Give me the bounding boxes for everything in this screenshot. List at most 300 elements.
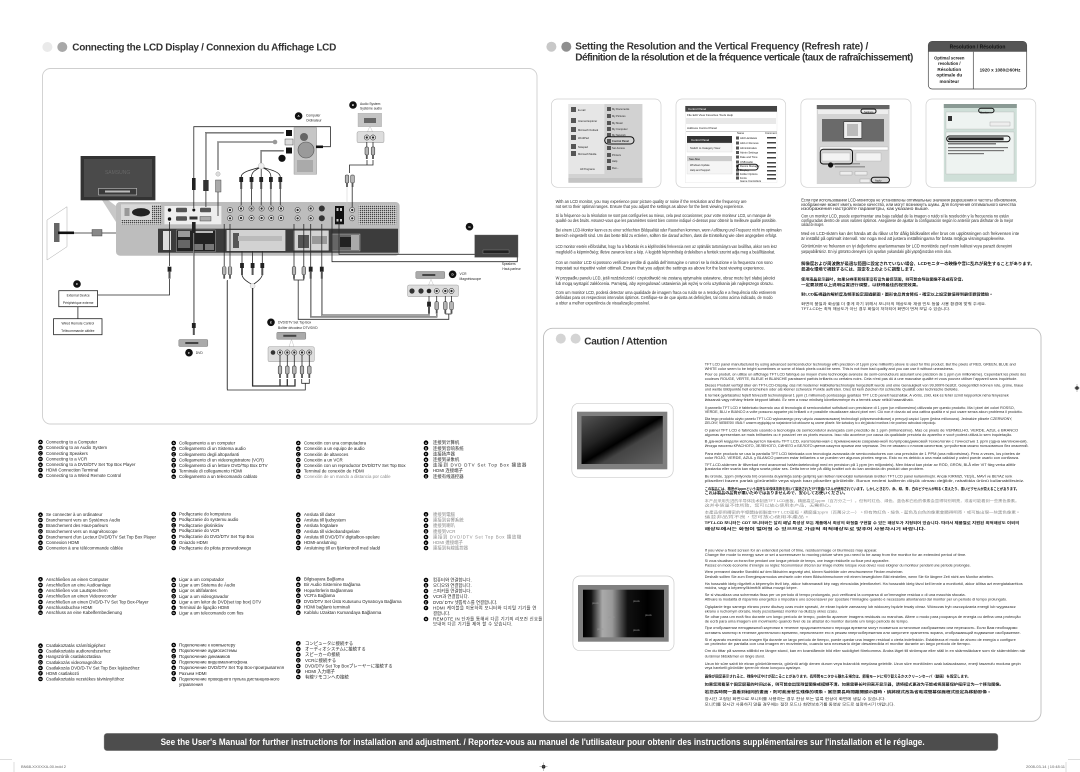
legend: Hungarian connection list: Csatlakoztatás számítógéphez	[46, 643, 106, 648]
legend: Italian connection list: C	[173, 452, 176, 456]
legend: Korean connection list: B	[425, 583, 428, 587]
caution text: dead pixels: ljusstarka eller svarta kan några svarta pixlar ses. Detta beror inte på dålig kvalitet och du kan använda din produkt utan problem.	[705, 466, 924, 471]
image: display with image retention: pixels	[592, 601, 599, 605]
legend: Swedish connection list: Ansluta högtalare	[304, 523, 339, 528]
legend: Russian connection list: Подключение DVD/DTV Set Top Box-проигрывателя	[179, 665, 285, 670]
legend: Japanese connection list: HDMI 入力端子	[305, 668, 336, 675]
legend: Simplified Chinese connection list: B	[425, 446, 428, 450]
external device C and wired remote control	[54, 222, 171, 335]
table: optimal resolution: Optimal screen	[934, 55, 965, 60]
legend: English connection list	[38, 440, 136, 478]
legend: Turkish connection list	[296, 576, 402, 615]
legend: English connection list: G	[39, 474, 42, 478]
table: optimal resolution: Resolution / Résolution	[950, 44, 1005, 50]
screenshot: display properties: Settings	[864, 110, 874, 114]
legend: Japanese connection list	[296, 640, 393, 680]
screenshot: vista display settings: Monitor	[980, 110, 989, 114]
screenshot: control panel: Control Panel	[688, 107, 707, 111]
screenshot: display properties: Apply	[875, 178, 882, 182]
display rear thumbnail: SAMSUNG	[105, 170, 130, 176]
legend: Traditional Chinese connection list: A	[425, 512, 428, 516]
caution text: dead pixels: 本产品采用先进的半导体技术制造TFT LCD面板，精度高达1ppm（百万分之一）。但有时红色、绿色、蓝色和白色的像素会显得特别明亮，或者可能看到一些黑色像素。	[705, 498, 1019, 503]
legend: Polish connection list: Podłączanie do komputera	[179, 512, 231, 516]
caution text: dead pixels: Bu üründe, 1ppm (milyonda bir) oranında duyarlılığa sahip gelişmiş yarı iletken teknolojisi kullanılarak üretilen TFT LCD panel kullanılmıştır. Ancak KIRMIZI, YEŞİL, MAVİ ve BEYAZ renk	[705, 474, 1012, 478]
legend: Simplified Chinese connection list: C	[425, 452, 428, 456]
text block: resolution notes, left column: W przypadku panelu LCD, jeśli rozdzielczość i częstotliwość nie zostaną optymalnie ustawione, obraz może być słabej jakości	[556, 276, 775, 280]
screenshot: start menu: E-mail	[578, 108, 586, 112]
footer banner: See the User's Manual for further instructions for installation and adjustment. / Reportez-vous au manuel de l'utilisateur pour obtenir des instructions supplémentaires sur l'installation et le réglage.	[161, 737, 925, 747]
screenshot: start menu	[551, 99, 661, 187]
table: optimal resolution: 1920 x 1080@60Hz	[980, 68, 1021, 73]
legend: Spanish connection list: Conexión de altavoces	[304, 452, 349, 457]
computer A: A	[298, 114, 301, 118]
legend: German connection list: Anschlussbuchse HDMI	[46, 605, 92, 610]
caution text: image retention: Passez en mode économie d'énergie ou réglez l'économiseur d'écran sur image mobile lorsque vous devez vous éloigner du moniteur pendant une période prolongée.	[705, 562, 971, 568]
legend: Korean connection list: D	[425, 595, 428, 599]
legend: Italian connection list	[171, 440, 268, 479]
caution text: dead pixels: Para este producto se usa la pantalla TFT LCD fabricada con tecnología avanzada de semiconductores con una precisión de 1 PPM (una millonésima). Pero a veces, los píxeles de	[705, 451, 1021, 456]
legend: Korean connection list: C	[425, 589, 428, 593]
legend: English connection list: B	[39, 446, 42, 450]
screenshot: start menu: Notepad	[578, 145, 588, 149]
legend: German connection list: Anschließen an einen Computer	[46, 577, 109, 582]
legend: German connection list	[38, 577, 149, 615]
caution text: dead pixels: WHITE color seem to be bright sometimes or some of black pixels could be seen. This is not from bad quality and you can use it without uneasiness.	[705, 366, 954, 371]
screenshot: start menu: My Computer	[612, 127, 628, 131]
print slug: 2008-03-14 | 10:48:11	[1026, 765, 1065, 769]
legend: Hungarian connection list: E	[39, 666, 42, 670]
legend: Italian connection list: B	[173, 447, 176, 451]
legend: German connection list: G	[39, 611, 42, 615]
legend: Portuguese connection list: Ligar os altifalantes	[179, 588, 218, 593]
legend: Polish connection list: E	[173, 535, 175, 539]
legend: Swedish connection list: A	[297, 513, 300, 517]
legend: Spanish connection list: Terminal de conexión de HDMI	[304, 468, 364, 474]
legend: Simplified Chinese connection list: A	[425, 441, 428, 445]
image: display with image retention	[573, 576, 674, 651]
legend: English connection list: A	[39, 440, 42, 444]
caution text: image retention: 画像が固定表示されると、残像やぼやけが起こることがあります。長時間モニタから離れる場合は、節電モードに切り替えるかスクリーンセーバ（動画）を設定します。	[705, 674, 971, 678]
legend: Swedish connection list: E	[297, 535, 299, 539]
legend: Swedish connection list: Ansluta till dator	[304, 512, 336, 517]
legend: Traditional Chinese connection list: G	[425, 546, 428, 550]
caution text: dead pixels: これは製品の品質が悪いためではありませんので、安心してお使いください。	[705, 490, 848, 495]
caution text: image retention: 장시간 고정된 화면으로 모니터를 사용하는 경우 잔상 또는 얼룩 현상이 화면에 생길 수 있습니다.	[705, 696, 886, 701]
legend: Japanese connection list: D	[297, 658, 300, 662]
speakers G: Haut-parleur	[502, 267, 522, 271]
section heading: resolution and refresh rate	[546, 41, 913, 63]
legend: French connection list: C	[39, 524, 42, 528]
legend: Russian connection list: Разъем HDMI	[179, 671, 207, 676]
legend: Japanese connection list: スピーカーの接続	[305, 651, 341, 658]
screenshot: display properties	[801, 99, 911, 187]
legend: Italian connection list: G	[173, 475, 176, 479]
legend: Traditional Chinese connection list: 連接到音響系統	[433, 516, 464, 524]
caution text: image retention: 모니터를 장시간 사용하지 않을 경우에는 절전 모드나 화면보호기를 동영상 모드로 설정하시기 바랍니다.	[705, 701, 895, 706]
caution text: image retention: Se olhar para um ecrã fixo durante um longo período de tempo, poderão aparecer imagens residuais ou manchas. Altere o modo para poupança de energia ou defina uma protecção	[705, 614, 1021, 619]
legend: Polish connection list: Podłączanie do VCR	[179, 528, 219, 533]
legend: Turkish connection list: E	[297, 599, 299, 603]
print slug	[0, 384, 1080, 772]
screenshot: start menu: My Network	[612, 133, 626, 137]
legend: Italian connection list: Collegamento di un videoregistratore (VCR)	[179, 458, 264, 462]
legend: English connection list: Connecting to an Audio System	[46, 445, 107, 450]
legend: Swedish connection list: Ansluta till videobandspelare	[304, 529, 360, 534]
caution text: dead pixels: ZIELONY, NIEBIESKI i BIAŁY czasem wyglądają na rozjaśnione lub widoczne są czarne piksele. Nie świadczy to o złej jakości monitora i nie powinno wzbudzać niepokoju.	[705, 420, 936, 425]
caution text: image retention: ekranu o ruchomym obrazie, kiedy pozostawiasz monitor na dłuższy okres czasu.	[705, 608, 838, 614]
speakers G: Speakers	[502, 262, 516, 266]
legend: Polish connection list: A	[173, 512, 176, 516]
legend: Japanese connection list: オーディオシステムに接続する	[305, 646, 366, 652]
legend: Spanish connection list: Conexión a un VCR	[304, 458, 343, 462]
caution text: dead pixels: VERDE, BLU e BIANCO a volte possono apparire più brillanti o è possibile visualizzare alcuni pixel neri. Ciò non è dovuto ad una cattiva qualità e si può usare senza alcun problema il prodotto.	[705, 409, 1023, 414]
text block: resolution notes, left column: not set to their optimal ranges. Ensure that you adjust the settings as above for the best viewing experience.	[556, 204, 744, 209]
legend: Simplified Chinese connection list: D	[425, 458, 428, 462]
speakers G: G	[468, 225, 471, 229]
legend: Turkish connection list: Kablolu Uzaktan Kumandaya Bağlanma	[304, 610, 382, 615]
legend: Spanish connection list: Conexión a un equipo de audio	[304, 446, 365, 451]
caution heading	[556, 334, 667, 348]
screenshot: control panel	[676, 99, 786, 187]
caution text: image retention: При отображении неподвижной картинки в течение продолжительного периода времени могут появиться остаточные изображения или нерезкость. Если Вам необходимо	[705, 625, 1018, 630]
speakers G	[332, 217, 522, 271]
panel: connection diagram	[42, 68, 537, 424]
legend: Korean connection list: VCR과 연결합니다.	[433, 593, 469, 600]
screenshot: control panel: Help and Support	[690, 168, 710, 172]
legend: Turkish connection list: B	[297, 583, 300, 587]
legend: Italian connection list: Collegamento a un telecomando cablato	[179, 474, 258, 479]
legend: Spanish connection list: F	[297, 469, 299, 473]
screenshot: control panel: Name	[737, 131, 745, 135]
caution text: image retention: Change the mode to energy save or set a screensaver to moving picture when you need to be away from the monitor for an extended period of time.	[705, 552, 966, 557]
screenshot: control panel: See Also	[689, 157, 700, 161]
legend: Portuguese connection list: G	[173, 611, 176, 615]
external device C and wired remote control: Wired Remote Control	[61, 322, 94, 326]
legend: Japanese connection list: コンピュータに接続する	[305, 640, 353, 647]
caution text: dead pixels: この製品には、精度が1ppmという高度な半導体技術を用いて製造されたTFT液晶パネルが使用されています。しかしときおり、赤、緑、青、白のピクセルが明るく見えたり、黒いピクセルが見えることがあります。	[705, 486, 1019, 491]
audio system B: B	[352, 103, 355, 107]
legend: Italian connection list: Collegamento degli altoparlanti	[179, 452, 239, 457]
legend: Spanish connection list: A	[297, 441, 300, 445]
text block: resolution notes, left column: megfelelő a képminőség; illetve zavaros lesz a kép. A legjobb képminőség érdekében a fentiek szerint adja meg a beállításokat.	[556, 250, 775, 254]
table: optimal resolution: Résolution	[937, 67, 961, 72]
legend: Hungarian connection list	[38, 643, 140, 682]
legend: Polish connection list: B	[173, 518, 176, 522]
image: display with image retention: pixels	[645, 613, 652, 617]
VCR D: Magnétoscope	[460, 277, 481, 281]
screenshot: control panel: Administrative	[740, 146, 757, 150]
legend: Swedish connection list: F	[297, 541, 299, 545]
legend: Italian connection list: Collegamento a un computer	[179, 440, 236, 446]
legend: Portuguese connection list: Ligar a um Sistema de Áudio	[179, 582, 236, 588]
legend: Traditional Chinese connection list: E	[425, 535, 427, 539]
screenshot: start menu: All Programs	[580, 167, 596, 171]
legend: Polish connection list: Podłączanie do DVD/DTV Set Top Box	[179, 534, 255, 539]
legend: Traditional Chinese connection list	[424, 511, 522, 552]
panel: caution	[544, 328, 1041, 721]
legend: Russian connection list: Подключение к компьютеру	[179, 642, 236, 648]
legend: Russian connection list: управления	[179, 682, 203, 687]
legend: Hungarian connection list: B	[39, 649, 42, 653]
screenshot: control panel: Control Panel	[691, 138, 710, 142]
text block: resolution notes, left column	[556, 199, 782, 306]
legend: Italian connection list: A	[173, 441, 176, 445]
front cable plugs and audio splitter	[192, 163, 282, 216]
legend: Turkish connection list: C	[297, 588, 300, 592]
caution text: image retention: Si vous visualisez un écran fixe pendant une longue période de temps, une image résiduelle ou floue peut apparaître.	[705, 558, 890, 563]
text block: resolution notes, right column: 解像度および周波数が最適な範囲に設定されていない場合、LCDモニターの映像や音に乱れが発生することがあります。	[801, 260, 1035, 267]
caution text: image retention: Uzun bir süre sabit bir ekran görüntülemeniz, görüntü artığı denen durum veya bulanıklık meydana gelebilir. Uzun süre monitörden uzak kalacaksanız, enerji tasarrufu moduna geçin	[705, 661, 1021, 666]
legend: Japanese connection list: 有線リモコンへの接続	[305, 674, 349, 680]
screenshot: control panel: Address Control Panel	[687, 126, 717, 130]
legend: Hungarian connection list: D	[39, 660, 42, 664]
wall outlet and power cable	[47, 207, 141, 260]
screenshot: control panel: Device Manager	[740, 164, 760, 168]
legend: Polish connection list: D	[173, 529, 176, 533]
legend: Russian connection list	[171, 642, 285, 687]
computer A	[194, 112, 330, 180]
audio system B: Audio System	[360, 102, 381, 106]
legend: Korean connection list: F	[425, 606, 427, 610]
legend: French connection list: Branchement vers un magnétoscope	[46, 529, 118, 534]
legend: Polish connection list: Podłączanie do pilota przewodowego	[179, 546, 252, 550]
legend: Hungarian connection list: Csatlakozás videomagnóhoz	[46, 660, 102, 665]
legend: Turkish connection list: Bilgisayara Bağlama	[304, 576, 344, 582]
caution text: image retention: Ha hosszabb ideig rögzített a képernyőn lévő kép, akkor hátramaradt kép vagy elmosódás jelentkezhet. Ha hosszabb ideig távol kell lennie a monitortól, akkor állítsa azt energiatakarékos	[705, 581, 1023, 586]
legend: Polish connection list: Podłączanie do systemu audio	[179, 517, 239, 522]
DVD set top box E: DVD/DTV Set Top Box	[278, 320, 311, 324]
legend: Spanish connection list: C	[297, 452, 300, 456]
text block: resolution notes, left column: Con un monitor LCD si possono verificare perdite di qualità dell'immagine o rumori se la risoluzione e la frequenza non sono	[556, 260, 773, 265]
text block: resolution notes, right column: Med en LCD-skärm kan det hända att du råkar ut för dålig bildkvalitet eller brus om upplösningen och frekvensen inte	[801, 231, 1020, 236]
caution text: image retention: Se si visualizza una schermata fissa per un periodo di tempo prolungato, può verificarsi la comparsa di un'immagine residua o di una macchia sfocata.	[705, 592, 966, 597]
text block: resolution notes, left column: Si la fréquence ou la résolution ne sont pas configurées au mieux, cela peut occasionner, pour votre moniteur LCD, un manque de	[556, 213, 772, 218]
legend: Spanish connection list	[296, 440, 406, 479]
legend: German connection list: F	[40, 605, 42, 609]
print slug: BN68-XXXXXA-00.indd 2	[21, 765, 66, 769]
legend: Simplified Chinese connection list	[424, 439, 527, 480]
legend: Traditional Chinese connection list: 連接到有線遙控器	[433, 544, 469, 552]
legend: Portuguese connection list: E	[173, 600, 175, 604]
table: optimal resolution: resolution /	[938, 61, 961, 66]
screenshot: start menu: My Music	[612, 121, 624, 125]
legend: Russian connection list: G	[173, 677, 176, 681]
HDMI device F	[179, 222, 208, 357]
legend: Traditional Chinese connection list: B	[425, 518, 428, 522]
computer A: Ordinateur	[306, 119, 322, 123]
legend: Korean connection list	[424, 576, 543, 628]
legend: Korean connection list: 보내어 다른 기기를 제어 할 수 있습니다.	[433, 620, 513, 628]
legend: Portuguese connection list	[171, 577, 261, 616]
legend: English connection list: F	[40, 468, 42, 472]
legend: Turkish connection list: A	[297, 577, 300, 581]
legend: Polish connection list: Gniazdo HDMI	[179, 540, 208, 545]
legend: Spanish connection list: G	[297, 475, 300, 479]
screenshot: start menu: Microsoft Outlook	[578, 128, 599, 132]
legend: Korean connection list: E	[425, 600, 427, 604]
legend: German connection list: E	[39, 600, 42, 604]
caution text: dead pixels: látszanak vagy néhány fekete képpont látható. Ez nem a rossz minőség következménye és a termék zavar nélkül használható.	[705, 397, 914, 402]
legend: Hungarian connection list: A	[39, 644, 42, 648]
caution text: dead pixels: Dla tego produktu użyto panelu TFT LCD wykonanego przy użyciu zaawansowanej technologii półprzewodnikowej o precyzji części 1ppm (jedna milionowa). Jednakże piksele CZERWONY,	[705, 416, 1012, 421]
screenshot: start menu: My Pictures	[612, 114, 626, 118]
legend: Turkish connection list: D	[297, 594, 300, 598]
legend: Portuguese connection list: C	[173, 589, 176, 593]
legend: Simplified Chinese connection list: 连接到录象机	[433, 456, 460, 463]
legend: Italian connection list: Terminale di collegamento HDMI	[179, 468, 242, 474]
legend: Traditional Chinese connection list: HDMI 連接端子	[433, 539, 464, 546]
legend: Portuguese connection list: B	[173, 583, 176, 587]
legend: Traditional Chinese connection list: C	[425, 524, 428, 528]
table: optimal resolution	[928, 41, 1027, 89]
legend: Italian connection list: Collegamento di un Sistema audio	[179, 446, 246, 451]
legend: Russian connection list: Подключение видеомагнитофона	[179, 660, 248, 664]
text block: resolution notes, right column: yaşayabilirsiniz. En iyi görüntü deneyimi için ayarları yukarıdaki gibi yaptığınızdan emin olun.	[801, 249, 952, 254]
footer banner	[104, 733, 998, 751]
legend: Korean connection list: 스피커를 연결합니다.	[433, 588, 472, 594]
legend: French connection list: Se connecter à un ordinateur	[46, 512, 103, 517]
legend: Simplified Chinese connection list: E	[425, 463, 427, 467]
legend: Hungarian connection list: G	[39, 677, 42, 681]
legend: English connection list: C	[39, 451, 42, 455]
legend: Spanish connection list: D	[297, 458, 300, 462]
legend: Simplified Chinese connection list: 连接有线遥控器	[433, 473, 464, 480]
legend: Swedish connection list: Anslutning till en fjärrkontroll med sladd	[304, 546, 381, 550]
legend: German connection list: Anschließen von Lautsprechern	[46, 588, 108, 593]
caution text: dead pixels: color ROJO, VERDE, AZUL y BLANCO parecen estar brillantes o se pueden ver algunos píxeles negros. Esto no es debido a una mala calidad y usted puede usarlo con confianza.	[705, 455, 1019, 460]
legend: Japanese connection list: E	[297, 664, 299, 668]
screenshot: start menu: Internet Explorer	[578, 119, 597, 123]
audio system B	[345, 101, 384, 207]
legend: Turkish connection list: VCR'a Bağlama	[304, 593, 336, 598]
external device C and wired remote control: Périphérique externe	[63, 301, 94, 305]
legend: Traditional Chinese connection list: 連接到 DVD/DTV Set Top Box 播放機	[433, 534, 522, 540]
legend: Turkish connection list: Bir Audio Sistemine Bağlama	[304, 582, 361, 587]
legend: English connection list: Connecting to a Wired Remote Control	[46, 473, 121, 478]
legend: Hungarian connection list: Csatlakoztatás vezetékes távirányítóhoz	[46, 676, 124, 682]
screenshot: control panel: Switch to Category View	[690, 146, 721, 150]
legend: French connection list: Branchement des Haut-parleurs	[46, 523, 109, 528]
legend: Hungarian connection list: C	[39, 655, 42, 659]
legend: Polish connection list: C	[173, 523, 176, 527]
legend: Korean connection list: HDMI 케이블을 이용하여 모니터와 디지털 기기를 연	[433, 604, 537, 612]
caution text: dead pixels: 해상도에서는 화질이 떨어질 수 있으므로 가급적 최적해상도로 맞추어 사용하시기 바랍니다.	[705, 526, 926, 531]
legend: Russian connection list: F	[173, 671, 175, 675]
legend: Korean connection list: DVD/ DTV 셋톱박스를 연결합니다.	[433, 599, 497, 606]
table: optimal resolution: optimale du	[936, 73, 962, 78]
text block: resolution notes, right column: изображение может иметь низкое качество, или могут возникнуть шумы. Для получения оптимального качества	[801, 202, 1017, 207]
legend: Italian connection list: F	[173, 469, 175, 473]
legend: Italian connection list: D	[173, 458, 176, 462]
caution text: dead pixels: pikselleri bazen parlak görünebilir veya siyah bazı pikseller görülebilir. Bunun nedeni kalitenin düşük olması değildir, rahatlıkla ürünü kullanabilirsiniz.	[705, 478, 1024, 483]
legend: Swedish connection list: Ansluta till ljudsystem	[304, 518, 346, 522]
caution text: image retention: Attivare la modalità di risparmio energetico o impostare uno screensaver per spostare l'immagine quando è necessario allontanarsi dal monitor per un periodo di tempo prolungato.	[705, 596, 1007, 602]
caution text: dead pixels	[705, 362, 1029, 531]
legend: Traditional Chinese connection list: F	[425, 541, 427, 545]
legend: Russian connection list: Подключение динамиков	[179, 654, 231, 659]
text block: resolution notes, right column: är inställd på optimalt intervall. Var noga med att justera inställningarna för bästa möjliga visningsupplevelse.	[801, 236, 1005, 241]
legend: French connection list: Connexion HDMI	[46, 540, 79, 545]
caution text: dead pixels: Pour ce produit, on utilise un affichage TFT LCD fabriqué au moyen d'une technologie avancée de semi-conducteurs assurant une précision de 1 ppm (un millionième). Cependant les pixels des	[705, 372, 1026, 376]
screenshot: control panel: Game Controllers	[740, 179, 762, 183]
legend: Turkish connection list: G	[297, 611, 300, 615]
DVD set top box E: E	[270, 320, 272, 324]
legend: English connection list: Connecting to a VCR	[46, 456, 87, 462]
caution text: dead pixels: TFT LCD panel manufactured by using advanced semiconductor technology with precision of 1ppm (one millionth) above is used for this product. But the pixels of RED, GREEN, BLUE and	[705, 362, 1016, 366]
legend: Japanese connection list: G	[297, 675, 300, 679]
legend: Polish connection list: F	[173, 540, 175, 544]
text block: resolution notes, left column: Com um monitor LCD, poderá detectar uma qualidade de imagem fraca ou ruído se a resolução e a frequência não estiverem	[556, 290, 776, 295]
legend: French connection list	[38, 512, 156, 550]
screenshot: control panel: Add Hardware	[740, 136, 758, 140]
legend: German connection list: Anschließen an einen Videorecorder	[46, 594, 117, 598]
screenshot: control panel: Windows Update	[690, 163, 710, 167]
screenshot: start menu: Control Panel	[612, 139, 629, 143]
legend: Simplified Chinese connection list: 连接扬声器	[433, 450, 455, 458]
caution text: image retention: оставить монитор в течение длительного времени, переключите его в режим энергосбережения или запустите хранитель экрана, отображающий подвижное изображение.	[705, 630, 1021, 635]
caution text: image retention: Om du tittar på samma stillbild en längre stund, kan en kvarstående bild eller suddighet förekomma. Ändra läget till strömspar eller ställ in en skärmsläckare som rör skärmbilden när	[705, 648, 1026, 653]
screenshot: control panel: Fonts	[740, 176, 747, 180]
legend: Korean connection list: A	[425, 578, 428, 582]
external device C and wired remote control: C	[76, 282, 79, 286]
caution heading: Caution / Attention	[584, 336, 667, 348]
caution text: dead pixels: TFT-LCD 모니터는 CDT 모니터와는 달리 패널 특성상 모든 제품에서 최상의 화질을 구현할 수 있는 해상도가 지정되어 있습니다. 따라서 제품별로 지원된 최적해상도 이외의	[705, 520, 1019, 525]
legend: French connection list: F	[40, 541, 42, 545]
caution text: image retention: Wenn permanent dasselbe Standbild auf dem Bildschirm angezeigt wird, können Nachbilder oder verschwommene Flecken erscheinen.	[705, 569, 903, 574]
legend: Portuguese connection list: Terminal de ligação HDMI	[179, 605, 229, 610]
caution text: dead pixels: couleurs ROUGE, VERTE, BLEUE et BLANCHE paraissent parfois brillants ou certains noirs. Cela n'est pas dû à une mauvaise qualité et vous pouvez utiliser l'appareil sans inquiétude.	[705, 376, 1018, 381]
legend: French connection list: E	[39, 535, 42, 539]
text block: resolution notes, left column: impostati sui rispettivi valori ottimali. Ensure that you adjust the settings as above for the best viewing experience.	[556, 266, 765, 270]
section heading: resolution and refresh rate: Définition de la résolution et de la fréquence verticale (taux de rafraîchissement)	[575, 52, 913, 63]
VCR D	[294, 270, 481, 319]
legend: French connection list: B	[39, 518, 42, 522]
text block: resolution notes, left column: qualité ou des bruits. Assurez-vous que les paramètres soient bien comme indiqué ci-dessus pour obtenir la meilleure qualité possible.	[556, 218, 777, 223]
text block: resolution notes, right column: calidad de imagen.	[801, 222, 824, 227]
legend: Russian connection list: B	[173, 649, 176, 653]
text block: resolution notes, left column: With an LCD monitor, you may experience poor picture quality or noise if the resolution and the frequency are	[556, 199, 747, 204]
legend: Turkish connection list: HDMI bağlantı terminali	[304, 604, 350, 610]
caution text: image retention: 如果您观看某个固定屏幕的时间过长，则可能会出现残留图像或模糊不清。如果需要长时间离开显示器，请将模式更改为节能或将屏幕保护程序设为一个移动图像。	[705, 682, 1004, 686]
legend: Swedish connection list: G	[297, 546, 300, 550]
screenshot: start menu: Help	[612, 159, 618, 163]
legend: Italian connection list: Collegamento di un lettore DVD/Top Box DTV	[179, 463, 268, 468]
caution text: image retention: módra, vagy a képernyőkímélőt állítsa mozgó képre.	[705, 585, 798, 590]
screenshot: start menu: My Documents	[612, 107, 630, 111]
legend: Russian connection list: A	[173, 643, 176, 647]
legend: Turkish connection list: F	[297, 605, 299, 609]
legend: Portuguese connection list: F	[173, 606, 175, 610]
external device C and wired remote control: Télécommande câblée	[61, 329, 95, 333]
legend: English connection list: D	[39, 457, 42, 461]
display back connector panel	[116, 202, 400, 256]
legend: Japanese connection list: B	[297, 647, 300, 651]
legend: Korean connection list: REMOTE IN 단자를 통해서 다른 기기의 리모컨 신호를	[433, 616, 543, 622]
legend: German connection list: A	[39, 577, 42, 581]
legend: Swedish connection list	[296, 512, 381, 550]
text block: resolution notes, left column: Bereich eingestellt sind. Um das beste Bild zu erzielen, sollten Sie darauf achten, dass die Einstellung wie oben angegeben erfolgt.	[556, 233, 777, 238]
legend: Polish connection list: Podłączanie głośników	[179, 523, 224, 528]
caution text: image retention: veya hareketli görüntüler içeren bir ekran koruyucu ayarlayın.	[705, 665, 801, 670]
image: display with image retention: pixels	[633, 599, 640, 603]
caution text: dead pixels: E termék gyártásához fejlett félvezető technológiával 1 ppm (1 milliomod) pontosságú gyártású TFT LCD panelt használtak. A vörös, zöld, kék és fehér színű képpontok néha fényesnek	[705, 392, 1009, 398]
caution text: image retention: If you view a fixed screen for an extended period of time, residual image or blurriness may appear.	[705, 548, 877, 552]
legend: Portuguese connection list: Ligar a um videogravador	[179, 594, 229, 599]
legend: Japanese connection list: A	[297, 641, 300, 645]
legend: Swedish connection list: HDMI-anslutning	[304, 540, 337, 545]
legend: Simplified Chinese connection list: G	[425, 474, 428, 478]
text block: resolution notes, right column: 使用液晶显示器时，如果分辨率和频率没有设为最佳范围，则可能会导致图像不良或有杂音。	[801, 277, 966, 282]
